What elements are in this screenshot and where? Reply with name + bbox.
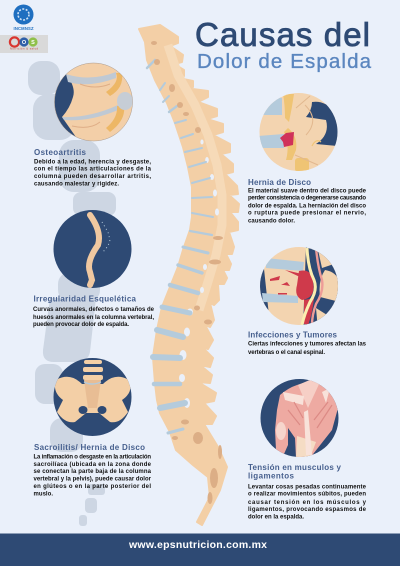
text: Tensión: dolor en la espalda. [248, 515, 304, 521]
icon: back muscles circle [260, 379, 338, 458]
spine mass [139, 25, 239, 525]
intervertebral discs [147, 60, 213, 433]
text: Sacroilitis: La inflamación o desgaste en la articulación [34, 455, 151, 461]
text: Osteoartritis: columna pueden desarrollar artritis, [34, 174, 151, 180]
text: Tensión: causar tensión en los músculos y [248, 500, 367, 506]
text: Osteoartritis: causando malestar y rigidez. [34, 182, 119, 188]
text: Sacroilitis: se conectan la parte baja de la columna [34, 469, 152, 475]
text: Sacroilitis: sacroilíaca (ubicada en la zona donde [34, 462, 152, 468]
heading: Tensión en musculos y ligamentos: ligamentos [248, 472, 295, 481]
text: Irregularidad Esquelética: huesos anormales en la columna vertebral, [33, 315, 154, 321]
text: Osteoartritis [34, 160, 152, 188]
text: Osteoartritis: con el tiempo las articulaciones de la [34, 167, 152, 173]
text: Hernia de Disco: perder consistencia o degenerarse causando [248, 196, 366, 202]
text: Irregularidad Esquelética: Curvas anormales, defectos o tamaños de [33, 307, 155, 313]
heading: Tensión en musculos y ligamentos: Tensión en musculos y [248, 463, 342, 472]
title: Dolor de Espalda [197, 50, 372, 73]
heading: Sacroilitis / Hernia de Disco: Sacroilitis/ Hernia de Disco [34, 443, 145, 452]
decorative grey vertebra shapes [28, 61, 116, 526]
bone shading [151, 41, 223, 504]
icon: curved spine circle [54, 210, 132, 288]
text: Hernia de Disco [248, 189, 367, 225]
heading: Irregularidad Esquelética: Irregularidad Esquelética [34, 294, 137, 304]
text: Sacroilitis: en glúteos o en la parte posterior del [34, 484, 151, 490]
text: Infecciones y Tumores: vertebras o el canal espinal. [248, 350, 325, 356]
heading: Tensión en musculos y ligamentos [248, 463, 342, 481]
logo: EOS: Nutrición & salud [10, 47, 39, 51]
text: Hernia de Disco: dolor de espalda. La herniación del disco [248, 203, 366, 209]
text: Tensión [248, 484, 367, 521]
title: Causas del [195, 16, 370, 53]
text: Tensión: ligamentos, provocando espasmos de [248, 507, 367, 513]
foramen gaps [179, 140, 219, 408]
text: Irregularidad Esquelética [33, 307, 155, 328]
title [195, 16, 372, 73]
footer bar [0, 534, 400, 566]
spine illustration [139, 25, 239, 525]
text: Sacroilitis: muslo. [34, 492, 53, 498]
text: Tensión: Levantar cosas pesadas continuamente [248, 484, 367, 490]
logo: INCMNSZ: INCMNSZ [14, 26, 34, 31]
text: Hernia de Disco: o ruptura puede presionar el nervio, [248, 211, 366, 217]
text: Hernia de Disco: causando dolor. [248, 219, 295, 225]
logo: EOS [0, 35, 48, 53]
icon: pelvis circle [54, 358, 132, 436]
footer bar: www.epsnutricion.com.mx [128, 539, 267, 551]
icon: herniated disc circle [255, 93, 339, 172]
text: Sacroilitis: vertebral y la pelvis), puede causar dolor [34, 477, 152, 483]
laminae highlight [168, 45, 222, 310]
text: Sacroilitis [34, 455, 152, 498]
logo: EOS: S [31, 40, 35, 46]
icon: infection and tumour circle [260, 247, 338, 325]
text: Infecciones y Tumores [248, 342, 367, 356]
heading: Osteoartritis: Osteoartritis [34, 148, 87, 157]
text: Infecciones y Tumores: Ciertas infecciones y tumores afectan las [248, 342, 367, 348]
icon: osteoarthritis circle [54, 62, 133, 142]
text: Osteoartritis: Debido a la edad, herencia y desgaste, [34, 160, 151, 166]
text: Irregularidad Esquelética: pueden provocar dolor de espalda. [33, 322, 129, 328]
heading: Hernia de Disco: Hernia de Disco [248, 178, 311, 187]
logo: EOS: O [22, 40, 27, 46]
logo: INCMNSZ [14, 4, 34, 31]
text: Hernia de Disco: El material suave dentro del disco puede [248, 189, 367, 195]
heading: Infecciones y Tumores: Infecciones y Tumores [248, 331, 338, 340]
text: Tensión: o realizar movimientos súbitos, pueden [248, 492, 366, 498]
